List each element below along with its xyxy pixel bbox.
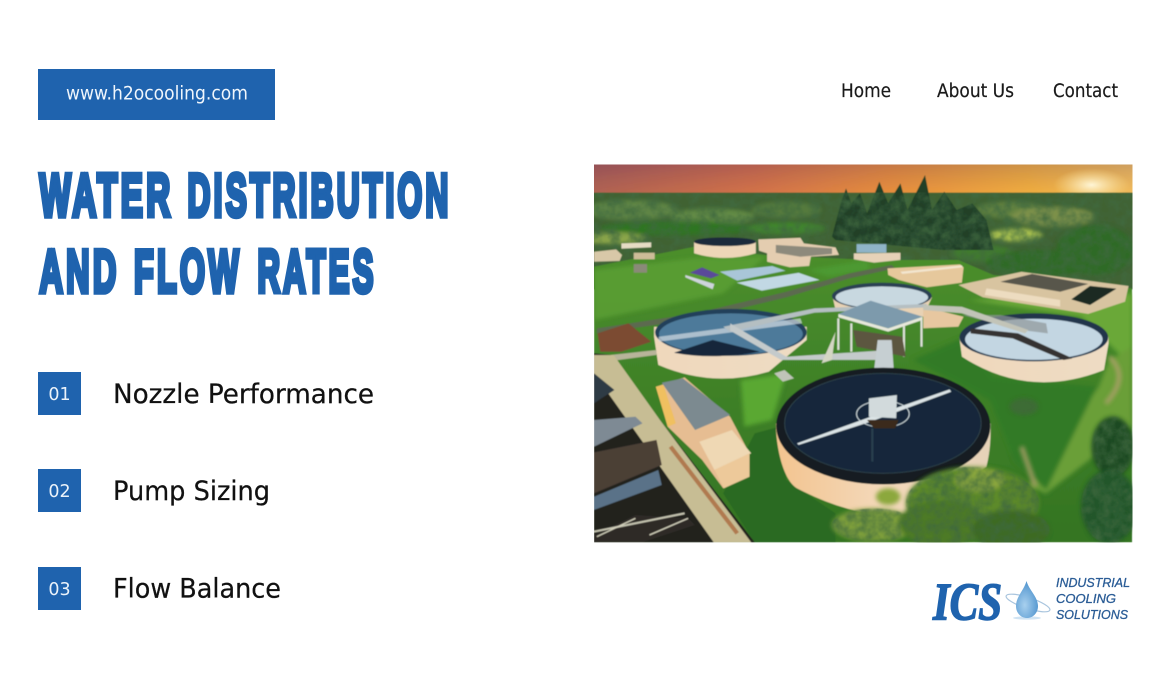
- logo wordmark: SOLUTIONS: [1056, 607, 1128, 622]
- control building: [656, 377, 751, 488]
- bushes and palms, lower right: [1009, 357, 1137, 543]
- right tank: [959, 313, 1109, 382]
- photo: water treatment plant at sunset: [583, 160, 1137, 550]
- title: FLOW: [134, 238, 242, 305]
- title: DISTRIBUTION: [188, 162, 452, 229]
- list item 01: [38, 372, 374, 415]
- list item 03: [38, 567, 281, 610]
- list item 03: Flow Balance: [113, 574, 281, 604]
- main round tank: [776, 368, 991, 515]
- rear round tank: [832, 283, 964, 328]
- list item 02: 02: [48, 482, 71, 502]
- left tank: [654, 309, 807, 379]
- title: RATES: [258, 238, 376, 305]
- list item 01: 01: [48, 385, 71, 405]
- navigation menu: About Us: [937, 81, 1014, 102]
- concrete channels, lower left: [594, 353, 755, 542]
- logo wordmark: [1056, 575, 1130, 622]
- sky: [594, 164, 1132, 194]
- filter beds: [685, 266, 820, 291]
- list item 02: Pump Sizing: [113, 476, 270, 507]
- list item 03: 03: [48, 580, 71, 600]
- rusty equipment: [598, 323, 651, 352]
- navigation menu: [841, 81, 1118, 102]
- list item 02: [38, 469, 270, 512]
- logo wordmark: INDUSTRIAL: [1056, 575, 1130, 590]
- lawn: [594, 247, 1132, 542]
- title: [40, 162, 452, 305]
- beige utility building: [887, 264, 964, 287]
- navigation menu: Contact: [1053, 81, 1118, 102]
- title: AND: [40, 238, 120, 305]
- website address button: www.h2ocooling.com: [66, 84, 248, 104]
- back tank: [694, 237, 756, 258]
- shaded lawn, lower left: [723, 427, 836, 542]
- back road: [597, 265, 895, 333]
- logo wordmark: COOLING: [1056, 591, 1116, 606]
- slide: [38, 69, 1132, 621]
- logo: Industrial Cooling Solutions: [932, 574, 1130, 632]
- foliage texture: [828, 410, 1137, 543]
- logo mark ICS: ICS: [932, 574, 1002, 632]
- far right settling basin: [958, 272, 1129, 314]
- navigation menu: Home: [841, 81, 891, 102]
- title: WATER: [40, 162, 174, 229]
- list item 01: Nozzle Performance: [113, 379, 374, 410]
- walkways and canopy: [611, 300, 1028, 382]
- icon: water drop with ring: [1004, 581, 1052, 620]
- foreground tree: [832, 467, 1050, 550]
- distant tree line: [583, 175, 1137, 289]
- back buildings: [594, 238, 900, 273]
- website address button: [38, 69, 275, 120]
